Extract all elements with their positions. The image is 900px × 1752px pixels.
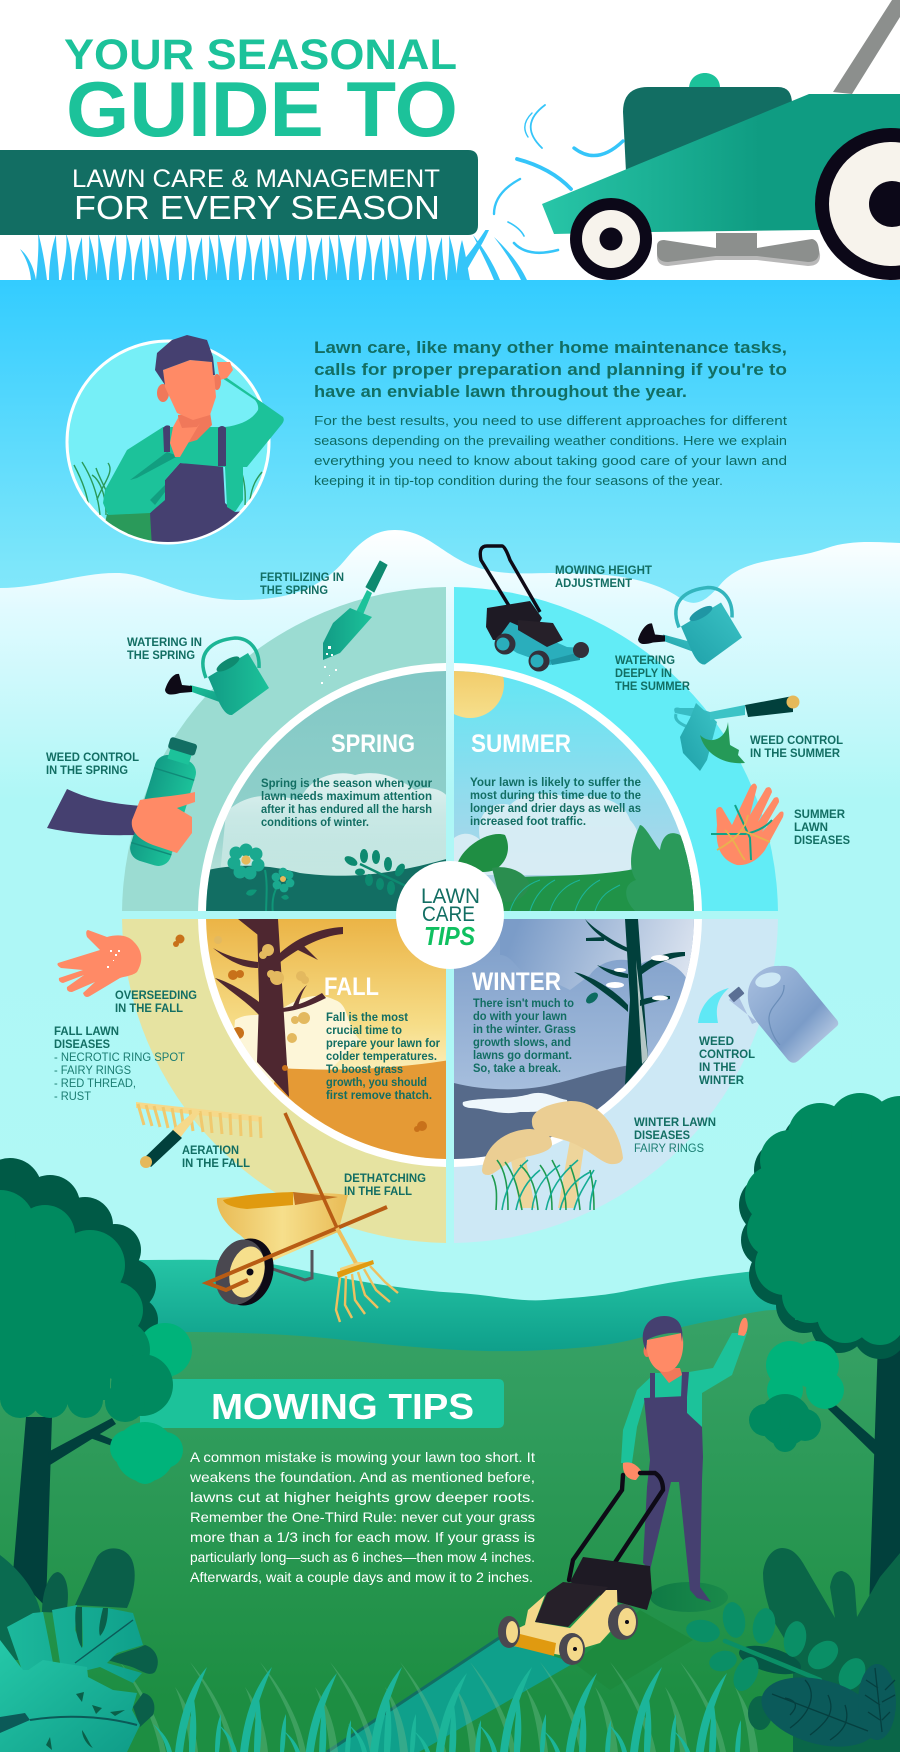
left tree <box>0 1158 192 1607</box>
text: fall <box>326 1012 440 1102</box>
title <box>64 31 458 153</box>
label: weed winter: IN THE <box>699 1061 736 1074</box>
header grass <box>20 230 527 280</box>
text: spring <box>261 778 433 829</box>
heading: fall: FALL <box>324 973 379 1001</box>
label: weed winter: WINTER <box>699 1074 745 1087</box>
text: spring: conditions of winter. <box>261 817 369 829</box>
panel: fall <box>122 919 446 1243</box>
text: fall: prepare your lawn for <box>326 1038 440 1050</box>
label: overseeding: IN THE FALL <box>115 1002 183 1015</box>
distant hill <box>0 1260 900 1400</box>
icon: wheelbarrow and rake <box>207 1113 398 1322</box>
text: fall: To boost grass <box>326 1064 403 1076</box>
label: winter diseases: FAIRY RINGS <box>634 1142 704 1155</box>
label: weed winter <box>699 1035 755 1087</box>
text: summer: increased foot traffic. <box>470 816 586 828</box>
label: weed summer: IN THE SUMMER <box>750 747 841 760</box>
subtitle banner: LAWN CARE & MANAGEMENT <box>72 165 440 193</box>
label: fertilizing: THE SPRING <box>260 584 328 597</box>
title: YOUR SEASONAL <box>64 31 457 79</box>
mowing tips text: particularly long—such as 6 inches—then mow 4 inches. <box>190 1549 535 1565</box>
text: fall: Fall is the most <box>326 1012 408 1024</box>
label: fertilizing: FERTILIZING IN <box>260 571 344 584</box>
intro text: Lawn care, like many other home maintenance tasks, <box>314 338 787 357</box>
intro text: keeping it in tip-top condition during the four seasons of the year. <box>314 474 723 488</box>
mowing tips heading: MOWING TIPS <box>211 1386 474 1427</box>
label: weed spring: WEED CONTROL <box>46 751 139 764</box>
label: mowing height <box>555 564 653 590</box>
text: winter: growth slows, and <box>473 1037 571 1049</box>
label: winter diseases <box>634 1116 716 1155</box>
icon: hoe and weed <box>674 696 800 771</box>
mowing tips text: weakens the foundation. And as mentioned before, <box>189 1469 535 1485</box>
white cloud band <box>0 530 900 900</box>
text: fall: crucial time to <box>326 1025 402 1037</box>
text: winter: lawns go dormant. <box>473 1050 572 1062</box>
text: winter: in the winter. Grass <box>473 1024 576 1036</box>
intro text: everything you need to know about taking good care of your lawn and <box>314 454 787 468</box>
label: weed winter: CONTROL <box>699 1048 755 1061</box>
mowing tips heading <box>140 1379 504 1428</box>
label: aeration <box>182 1144 250 1170</box>
intro text <box>314 338 788 488</box>
mowing tips text: more than a 1/3 inch for each mow. If your grass is <box>190 1529 535 1545</box>
text: spring: after it has endured all the harsh <box>261 804 432 816</box>
label: weed winter: WEED <box>699 1035 734 1048</box>
label: watering spring: WATERING IN <box>127 636 202 649</box>
icon: hand with diseased grass <box>711 784 784 865</box>
label: dethatching: IN THE FALL <box>344 1185 412 1198</box>
text: fall: colder temperatures. <box>326 1051 437 1063</box>
heading: winter: WINTER <box>472 968 561 996</box>
label: summer diseases: LAWN <box>794 821 828 834</box>
label: fertilizing <box>260 571 344 597</box>
right tree <box>739 1093 900 1660</box>
center badge: TIPS <box>424 921 476 951</box>
icon: weed control jug <box>698 966 838 1063</box>
text: summer: Your lawn is likely to suffer the <box>470 777 641 789</box>
icon: fertilizer trowel <box>321 561 387 684</box>
mowing tips text: lawns cut at higher heights grow deeper roots. <box>190 1489 535 1505</box>
label: summer diseases: SUMMER <box>794 808 846 821</box>
center badge: LAWN <box>421 885 480 908</box>
label: weed summer: WEED CONTROL <box>750 734 843 747</box>
label: fall diseases: - NECROTIC RING SPOT <box>54 1051 185 1064</box>
label: overseeding: OVERSEEDING <box>115 989 197 1002</box>
label: dethatching <box>344 1172 426 1198</box>
icon: mushrooms and grass <box>482 1101 623 1210</box>
panel: spring <box>122 587 446 911</box>
intro text: have an enviable lawn throughout the year. <box>314 382 687 401</box>
intro text: seasons depending on the prevailing weather conditions. Here we explain <box>314 434 787 448</box>
text: spring: lawn needs maximum attention <box>261 791 432 803</box>
center badge <box>396 861 504 969</box>
label: fall diseases: FALL LAWN <box>54 1025 119 1038</box>
label: weed summer <box>750 734 843 760</box>
label: winter diseases: WINTER LAWN <box>634 1116 716 1129</box>
subtitle banner <box>0 150 478 235</box>
intro text: calls for proper preparation and planning if you're to <box>314 360 787 379</box>
label: dethatching: DETHATCHING <box>344 1172 426 1185</box>
label: fall diseases: - FAIRY RINGS <box>54 1064 131 1077</box>
label: weed spring: IN THE SPRING <box>46 764 128 777</box>
heading: summer: SUMMER <box>471 730 571 758</box>
mowing tips text: Remember the One-Third Rule: never cut your grass <box>190 1509 535 1525</box>
text: summer: longer and drier days as well as <box>470 803 641 815</box>
panel: summer <box>454 587 778 911</box>
text: fall: growth, you should <box>326 1077 427 1089</box>
foreground lawn <box>0 1300 900 1752</box>
icon: spring watering can <box>165 638 269 715</box>
label: watering summer: DEEPLY IN <box>615 667 672 680</box>
label: watering summer: THE SUMMER <box>615 680 691 693</box>
text: summer <box>470 777 641 828</box>
icon: header lawn mower <box>494 0 900 280</box>
mown strip <box>327 1638 574 1752</box>
icon: seeding hand <box>57 930 141 997</box>
label: watering spring <box>127 636 202 662</box>
label: winter diseases: DISEASES <box>634 1129 690 1142</box>
icon: aeration rake <box>136 1102 262 1168</box>
text: summer: most during this time due to the <box>470 790 641 802</box>
label: summer diseases <box>794 808 850 847</box>
text: winter: There isn't much to <box>473 998 574 1010</box>
label: watering summer <box>615 654 691 693</box>
panel: winter <box>454 919 778 1243</box>
center badge: CARE <box>422 903 475 926</box>
label: summer diseases: DISEASES <box>794 834 850 847</box>
label: weed spring <box>46 751 139 777</box>
mowing tips text <box>189 1449 535 1585</box>
label: fall diseases: - RUST <box>54 1090 91 1103</box>
text: winter: So, take a break. <box>473 1063 561 1075</box>
mowing tips text: A common mistake is mowing your lawn too short. It <box>190 1449 535 1465</box>
label: mowing height: ADJUSTMENT <box>555 577 633 590</box>
intro portrait <box>67 335 284 548</box>
subtitle banner: FOR EVERY SEASON <box>74 189 440 226</box>
intro text: For the best results, you need to use different approaches for different <box>314 414 788 428</box>
text: spring: Spring is the season when your <box>261 778 433 790</box>
text: fall: first remove thatch. <box>326 1090 432 1102</box>
label: mowing height: MOWING HEIGHT <box>555 564 653 577</box>
foreground grass <box>120 1662 758 1752</box>
text: winter: do with your lawn <box>473 1011 567 1023</box>
icon: falling leaf <box>173 934 184 947</box>
label: watering summer: WATERING <box>615 654 675 667</box>
text: winter <box>473 998 576 1075</box>
heading: spring: SPRING <box>331 730 415 758</box>
label: overseeding <box>115 989 197 1015</box>
label: fall diseases: DISEASES <box>54 1038 110 1051</box>
left foliage <box>0 1548 158 1752</box>
mowing tips text: Afterwards, wait a couple days and mow it to 2 inches. <box>190 1569 533 1585</box>
label: aeration: IN THE FALL <box>182 1157 250 1170</box>
icon: spray bottle in hand <box>47 735 204 869</box>
icon: summer watering can <box>638 588 742 665</box>
label: fall diseases: - RED THREAD, <box>54 1077 136 1090</box>
label: fall diseases <box>54 1025 185 1103</box>
title: GUIDE TO <box>66 65 458 153</box>
icon: push mower <box>480 546 589 672</box>
right foliage <box>684 1548 900 1752</box>
gardener with mower <box>498 1316 748 1690</box>
label: watering spring: THE SPRING <box>127 649 195 662</box>
label: aeration: AERATION <box>182 1144 239 1157</box>
